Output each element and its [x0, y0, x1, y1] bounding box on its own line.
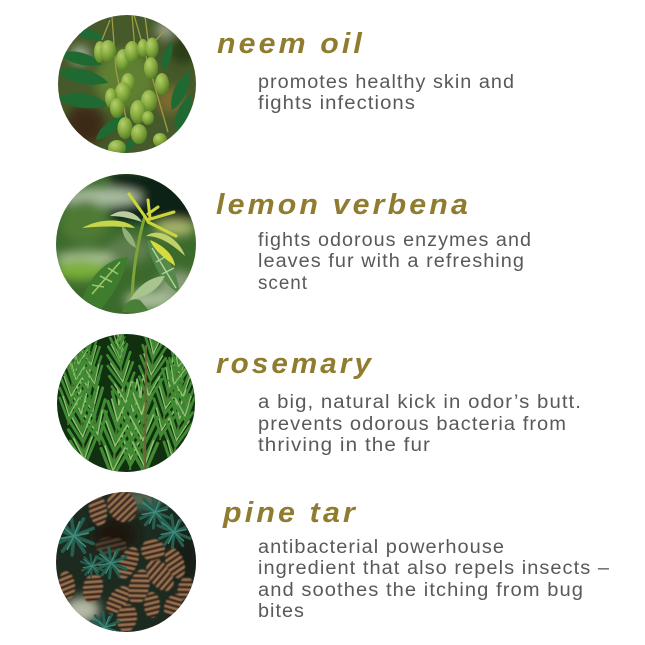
heading: lemon verbena: lemon verbena [216, 189, 471, 221]
text: pine tar description: ingredient that also repels insects – [258, 558, 610, 579]
text: lemon verbena description: fights odorous enzymes and [258, 230, 532, 251]
text: lemon verbena description: leaves fur with a refreshing [258, 251, 525, 272]
text: rosemary description: prevents odorous bacteria from [258, 414, 567, 435]
photo: lemon verbena plant [54, 172, 200, 314]
text: rosemary description: thriving in the fur [258, 435, 431, 456]
photo: neem oil fruit [57, 15, 197, 157]
text: neem oil description: promotes healthy skin and [258, 72, 515, 93]
text: pine tar description [258, 537, 610, 622]
photo: rosemary sprigs [57, 334, 195, 472]
text: neem oil description: fights infections [258, 93, 416, 114]
text: rosemary description: a big, natural kick in odor’s butt. [258, 392, 582, 413]
text: rosemary description [258, 392, 582, 456]
text: neem oil description [258, 72, 515, 114]
photo: pine tar cones [56, 492, 196, 632]
heading: pine tar: pine tar [222, 497, 358, 529]
text: pine tar description: and soothes the itching from bug [258, 580, 584, 601]
heading: neem oil: neem oil [217, 28, 365, 60]
heading: rosemary: rosemary [216, 348, 374, 380]
text: lemon verbena description: scent [258, 273, 308, 294]
text: pine tar description: antibacterial powerhouse [258, 537, 505, 558]
text: lemon verbena description [258, 230, 532, 294]
text: pine tar description: bites [258, 601, 305, 622]
